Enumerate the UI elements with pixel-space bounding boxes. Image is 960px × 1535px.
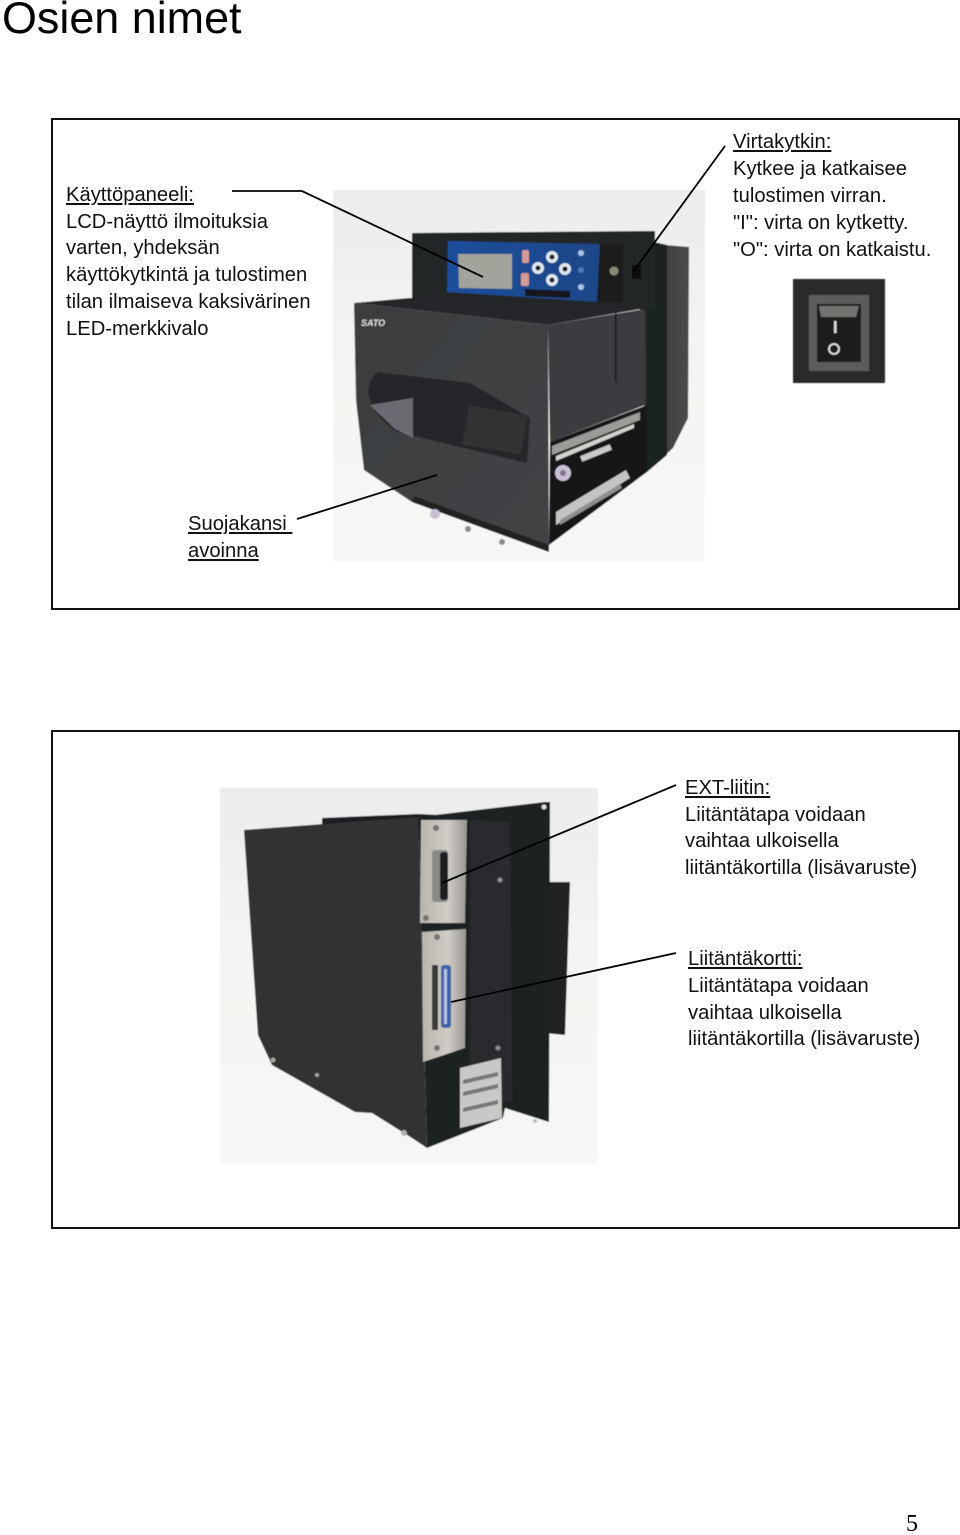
callout: interface card: liitäntäkortilla (lisävaruste) [688, 1028, 920, 1050]
callout: control panel: Käyttöpaneeli: [66, 184, 194, 206]
callout: control panel: LCD-näyttö ilmoituksia [66, 211, 269, 233]
callout: EXT connector: vaihtaa ulkoisella [685, 830, 840, 852]
callout: EXT connector [685, 777, 917, 879]
photo: power switch [793, 279, 885, 383]
callout: power switch: "O": virta on katkaistu. [733, 239, 931, 261]
callout: power switch: Kytkee ja katkaisee [733, 158, 907, 180]
photo: printer front [333, 190, 705, 561]
callout: protective cover: Suojakansi [188, 513, 292, 535]
callout: EXT connector: Liitäntätapa voidaan [685, 804, 866, 826]
callout: interface card [688, 948, 920, 1050]
arrow: EXT connector [442, 785, 676, 883]
callout: power switch [733, 131, 931, 261]
panel: front view [52, 119, 959, 609]
callout: control panel: LED-merkkivalo [66, 318, 208, 340]
callout: power switch: tulostimen virran. [733, 185, 887, 207]
callout: power switch: Virtakytkin: [733, 131, 831, 153]
callout: interface card: Liitäntäkortti: [688, 948, 802, 970]
callout: interface card: Liitäntätapa voidaan [688, 975, 869, 997]
photo: printer front: SATO [361, 318, 385, 328]
callout: control panel: varten, yhdeksän [66, 237, 220, 259]
arrow: interface card [451, 953, 676, 1002]
callout: interface card: vaihtaa ulkoisella [688, 1002, 843, 1024]
callout: EXT connector: liitäntäkortilla (lisävaruste) [685, 857, 917, 879]
callout: control panel: käyttökytkintä ja tulostimen [66, 264, 307, 286]
photo: printer rear [220, 788, 598, 1164]
arrow: control panel [232, 191, 483, 277]
arrow: power switch [633, 146, 725, 272]
callout: protective cover: avoinna [188, 540, 259, 562]
callout: protective cover [188, 513, 292, 562]
callout: control panel: tilan ilmaiseva kaksivärinen [66, 291, 311, 313]
callout: EXT connector: EXT-liitin: [685, 777, 770, 799]
callout: power switch: "I": virta on kytketty. [733, 212, 909, 234]
arrow: protective cover [297, 475, 437, 519]
callout: control panel [66, 184, 311, 340]
panel: rear view [52, 731, 959, 1228]
